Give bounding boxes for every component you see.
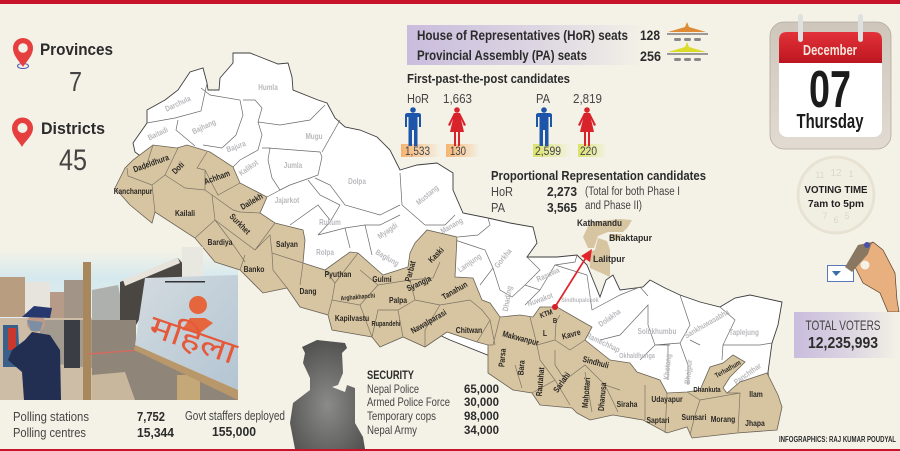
panel: proportional representation candidates: 3,565 bbox=[547, 200, 577, 215]
panel: seats band: 256 bbox=[640, 49, 661, 64]
panel: polling stations stats bbox=[13, 408, 285, 440]
map: non-polling white districts: Dolakha bbox=[596, 306, 623, 329]
map: polling tan districts: Dhanusa bbox=[596, 381, 609, 411]
map: polling tan districts: Kailali bbox=[175, 208, 195, 218]
icon: PA male figure bbox=[536, 107, 552, 146]
panel: first-past-the-post candidates: 1,533 bbox=[405, 146, 430, 158]
panel: provinces: Provinces bbox=[40, 40, 113, 59]
panel: voting time clock: 11 bbox=[815, 170, 825, 180]
map: polling tan districts: Syangja bbox=[405, 273, 433, 294]
map: polling tan districts: Mahottari bbox=[580, 377, 593, 408]
map: non-polling white districts: Bajura bbox=[225, 138, 248, 154]
map inset: Kathmandu valley bbox=[577, 218, 652, 277]
map: non-polling white districts: Baglung bbox=[374, 247, 401, 268]
panel: polling stations stats: Polling centres bbox=[13, 425, 86, 440]
map: non-polling white districts: Dhading bbox=[500, 285, 514, 312]
photo: polling booth with officer and women's sign: महिला bbox=[145, 309, 242, 371]
map: polling tan districts: B bbox=[553, 317, 557, 325]
map: non-polling white districts: Panchthar bbox=[732, 361, 763, 387]
map: non-polling white districts bbox=[133, 53, 782, 400]
map: polling tan districts: L bbox=[543, 328, 547, 338]
panel: security numbers: SECURITY bbox=[367, 368, 414, 382]
panel: security numbers: 98,000 bbox=[464, 409, 499, 423]
map inset: Kathmandu valley: Lalitpur bbox=[593, 254, 625, 265]
panel: seats band: 128 bbox=[640, 28, 660, 43]
panel: polling stations stats: Polling stations bbox=[13, 409, 89, 424]
panel: security numbers: Armed Police Force bbox=[367, 395, 450, 409]
map: non-polling white districts: Gorkha bbox=[492, 246, 514, 270]
panel: polling stations stats: 15,344 bbox=[137, 425, 175, 440]
panel: provinces: 7 bbox=[69, 66, 82, 97]
map: polling tan districts: Surkhet bbox=[227, 212, 253, 237]
map: non-polling white districts: Rasuwa bbox=[535, 265, 562, 284]
map inset: Kathmandu valley: Bhaktapur bbox=[609, 233, 652, 244]
map: polling tan districts: Kapilvastu bbox=[335, 313, 369, 323]
map: non-polling white districts: Okhaldhunga bbox=[619, 352, 655, 360]
bar: HoR female bbox=[446, 144, 480, 157]
panel: voting time clock: 7 bbox=[822, 211, 828, 221]
map: non-polling white districts: Darchula bbox=[163, 93, 193, 114]
map: non-polling white districts: Rolpa bbox=[316, 247, 335, 257]
map: polling tan districts: Sarlahi bbox=[551, 370, 572, 395]
panel: districts: Districts bbox=[41, 119, 105, 138]
map: polling tan districts: Bara bbox=[516, 359, 527, 376]
map: polling tan districts: Sunsari bbox=[682, 412, 706, 422]
panel: voting time clock bbox=[798, 157, 874, 233]
panel: security numbers: 65,000 bbox=[464, 382, 499, 396]
map inset: Kathmandu valley: Kathmandu bbox=[577, 218, 622, 229]
map: polling tan districts: Dadeldhura bbox=[132, 152, 171, 174]
panel: first-past-the-post candidates: 220 bbox=[580, 146, 597, 158]
panel: first-past-the-post candidates bbox=[401, 71, 607, 158]
panel: proportional representation candidates: (Total for both Phase I bbox=[585, 186, 680, 198]
panel: total voters bbox=[794, 312, 900, 358]
map: polling tan districts: Doti bbox=[170, 160, 186, 176]
map: polling tan districts: Chitwan bbox=[456, 325, 482, 335]
icon: HoR pagoda bbox=[667, 22, 708, 41]
map: non-polling white districts: Myagdi bbox=[376, 220, 399, 241]
panel: voting time clock: 12 bbox=[830, 168, 842, 179]
map: non-polling white districts: Baitadi bbox=[146, 124, 170, 143]
map: polling tan districts: Parsa bbox=[496, 347, 508, 367]
map: non-polling white districts: Bajhang bbox=[190, 117, 217, 136]
map: polling tan districts: KTM bbox=[539, 308, 554, 320]
map: non-polling white districts: Humla bbox=[258, 82, 279, 92]
map: polling tan districts: Dhankuta bbox=[693, 386, 721, 394]
map: polling tan districts bbox=[114, 145, 782, 438]
map: non-polling white districts: Khotang bbox=[661, 353, 673, 380]
bar: PA female bbox=[578, 144, 607, 157]
panel: voting time clock: VOTING TIME bbox=[804, 184, 868, 196]
map: non-polling white districts: Jajarkot bbox=[275, 195, 300, 205]
map: polling tan districts: Kanchanpur bbox=[114, 186, 152, 196]
panel: first-past-the-post candidates: 130 bbox=[450, 146, 466, 158]
map: non-polling white districts: Sindhupalchok bbox=[561, 298, 599, 304]
panel: polling stations stats: 155,000 bbox=[212, 424, 256, 439]
map: non-polling white districts: Nuwakot bbox=[526, 290, 555, 309]
map: polling tan districts: Banko bbox=[244, 264, 265, 274]
map: non-polling white districts: Mustang bbox=[414, 183, 440, 207]
panel: security numbers: 34,000 bbox=[464, 423, 499, 437]
icon: province pin bbox=[13, 38, 33, 68]
map: polling tan districts: Sindhuli bbox=[581, 354, 610, 371]
map: non-polling white districts: Rukum bbox=[319, 217, 341, 227]
panel: districts: 45 bbox=[59, 144, 87, 177]
panel: security numbers: 30,000 bbox=[464, 395, 499, 409]
icon: HoR male figure bbox=[405, 107, 421, 146]
bar: PA male bbox=[533, 144, 571, 157]
map: polling tan districts: Makwanpur bbox=[501, 329, 540, 348]
panel: security numbers bbox=[367, 368, 499, 437]
map: polling tan districts: Arghakhanchi bbox=[340, 293, 376, 303]
panel: security numbers: Nepal Army bbox=[367, 423, 417, 437]
panel: security numbers: Temporary cops bbox=[367, 409, 436, 423]
map: polling tan districts: Jhapa bbox=[745, 418, 765, 428]
panel: first-past-the-post candidates: PA bbox=[536, 91, 550, 106]
map: non-polling white districts: Solukhumbu bbox=[638, 326, 676, 336]
panel: first-past-the-post candidates: First-past-the-post candidates bbox=[407, 71, 570, 86]
panel: seats band: Provincial Assembly (PA) seats bbox=[417, 48, 587, 63]
panel: proportional representation candidates: HoR bbox=[491, 184, 513, 199]
map: polling tan districts: Tanahun bbox=[440, 279, 469, 302]
icon: hand stamping ballot bbox=[828, 242, 899, 312]
icon: PA pagoda bbox=[667, 42, 708, 61]
icon: district pin bbox=[12, 118, 33, 147]
map: polling tan districts: Gulmi bbox=[372, 274, 392, 284]
icon: security officer silhouette bbox=[290, 340, 365, 449]
panel: first-past-the-post candidates: 2,819 bbox=[573, 91, 602, 106]
map: polling tan districts: Saptari bbox=[646, 415, 670, 425]
map: polling tan districts: Terhathum bbox=[714, 359, 743, 380]
panel: calendar: December bbox=[803, 42, 857, 59]
map: polling tan districts: Morang bbox=[711, 414, 736, 424]
map: non-polling white districts: Lamjung bbox=[456, 251, 483, 274]
panel: calendar: Thursday bbox=[796, 111, 864, 133]
map: polling tan districts: Dang bbox=[300, 286, 317, 296]
arrow: Kathmandu valley pointer bbox=[552, 249, 592, 310]
map: polling tan districts: Ilam bbox=[749, 389, 763, 399]
photo: polling booth with officer and women's sign bbox=[0, 247, 242, 400]
map: Nepal districts bbox=[114, 53, 782, 438]
panel: seats band bbox=[407, 22, 708, 65]
panel: provinces bbox=[13, 38, 113, 97]
panel: proportional representation candidates: 2,273 bbox=[547, 184, 577, 199]
map: polling tan districts: Dailekh bbox=[239, 191, 265, 212]
panel: voting time clock: 5 bbox=[844, 211, 850, 221]
icon: HoR female figure bbox=[448, 107, 466, 146]
panel: proportional representation candidates bbox=[491, 168, 706, 215]
map: non-polling white districts: Sankhuwasabha bbox=[682, 306, 732, 340]
map: non-polling white districts: Bhojpur bbox=[682, 359, 694, 384]
panel: polling stations stats: Govt staffers deployed bbox=[185, 408, 285, 423]
map: polling tan districts: Kavre bbox=[561, 327, 582, 342]
map: non-polling white districts: Dolpa bbox=[348, 176, 367, 186]
panel: first-past-the-post candidates: 1,663 bbox=[443, 91, 472, 106]
panel: proportional representation candidates: Proportional Representation candidates bbox=[491, 168, 706, 183]
map: polling tan districts: Palpa bbox=[389, 295, 408, 305]
map: non-polling white districts: Jumla bbox=[284, 160, 303, 170]
panel: proportional representation candidates: PA bbox=[491, 200, 505, 215]
panel: first-past-the-post candidates: HoR bbox=[407, 91, 429, 106]
map: polling tan districts: Rautahat bbox=[534, 366, 547, 397]
map: polling tan districts: Salyan bbox=[276, 239, 298, 249]
map: polling tan districts: Siraha bbox=[617, 399, 638, 409]
map: polling tan districts: Udayapur bbox=[651, 394, 683, 404]
panel: first-past-the-post candidates: 2,599 bbox=[535, 146, 561, 158]
panel: total voters: 12,235,993 bbox=[808, 335, 878, 352]
map: polling tan districts: Bardiya bbox=[208, 237, 233, 247]
map: polling tan districts: Achham bbox=[203, 168, 231, 187]
map: polling tan districts: Kaski bbox=[426, 245, 446, 265]
map: non-polling white districts: Taplejung bbox=[729, 327, 759, 337]
panel: proportional representation candidates: and Phase II) bbox=[585, 200, 642, 212]
panel: polling stations stats: 7,752 bbox=[137, 409, 165, 424]
map: non-polling white districts: Kalikot bbox=[237, 157, 260, 178]
icon: PA female figure bbox=[578, 107, 596, 146]
panel: voting time clock: 6 bbox=[833, 215, 839, 225]
panel: calendar: 07 bbox=[809, 61, 851, 119]
map: non-polling white districts: Mugu bbox=[305, 131, 323, 141]
panel: calendar bbox=[770, 14, 891, 149]
map: non-polling white districts: Manang bbox=[439, 215, 465, 236]
map: polling tan districts: Rupandehi bbox=[372, 320, 401, 328]
map: polling tan districts: Parbat bbox=[403, 259, 418, 283]
panel: voting time clock: 7am to 5pm bbox=[808, 198, 864, 210]
photo backdrop: sky bbox=[0, 250, 238, 330]
panel: security numbers: Nepal Police bbox=[367, 382, 419, 396]
panel: seats band: House of Representatives (HoR) seats bbox=[417, 28, 628, 43]
map: polling tan districts: Nawalparasi bbox=[409, 307, 448, 336]
panel: districts bbox=[12, 118, 105, 177]
map: non-polling white districts: Ramechhap bbox=[585, 330, 622, 355]
bar: HoR male bbox=[401, 144, 441, 157]
panel: voting time clock: 1 bbox=[848, 169, 854, 179]
map: polling tan districts: Pyuthan bbox=[325, 269, 352, 279]
